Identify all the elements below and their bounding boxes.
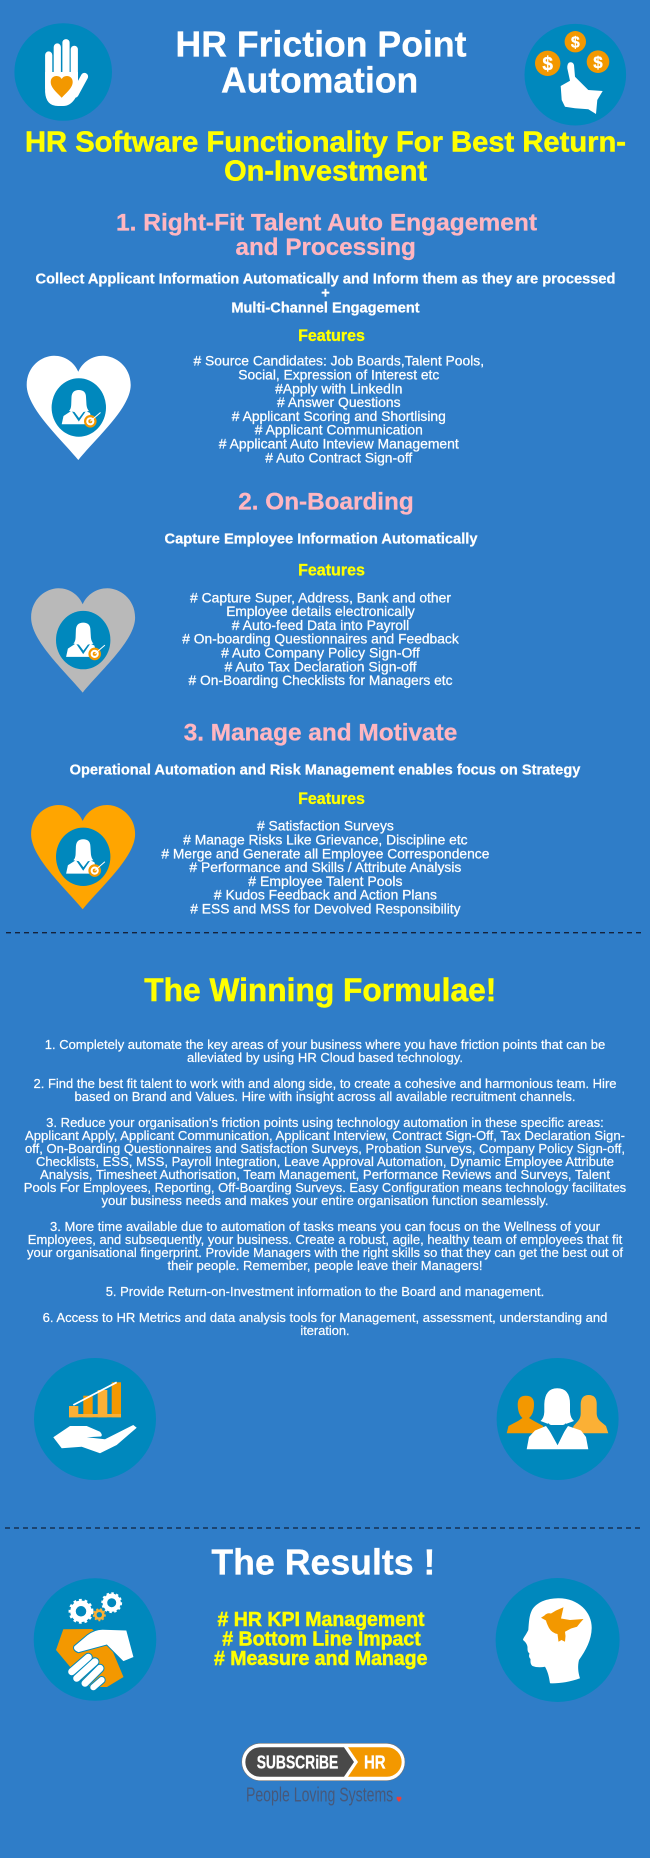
- winning formulae numbered text: off, On-Boarding Questionnaires and Satisfaction Surveys, Probation Surveys, Company Policy Sign-off,: [25, 1141, 625, 1156]
- icon: thumbs up with dollar coins: [524, 24, 626, 126]
- section 3 feature list: # Manage Risks Like Grievance, Discipline etc: [183, 832, 468, 848]
- logo: subscribe hr: SUBSCRiBE: [257, 1751, 338, 1772]
- section 2 feature list: # Auto Tax Declaration Sign-off: [224, 659, 417, 674]
- section 1 feature list: # Auto Contract Sign-off: [265, 450, 412, 465]
- winning formulae numbered text: Pools For Employees, Reporting, Off-Boarding Surveys. Easy Configuration means technology facilitates: [24, 1180, 627, 1195]
- results list: # Bottom Line Impact: [222, 1629, 421, 1651]
- section 2 description: Capture Employee Information Automatically: [164, 531, 478, 547]
- winning formulae numbered text: Employees, and subsequently, your business. Create a robust, agile, healthy team of employees that fit: [28, 1232, 623, 1247]
- title: HR Friction Point: [176, 24, 467, 65]
- title: [176, 24, 467, 100]
- title: Automation: [221, 59, 418, 100]
- icon: hand holding bar chart: [34, 1358, 156, 1480]
- icon: raised hand with heart: [14, 23, 112, 121]
- section 3 feature list: # Performance and Skills / Attribute Analysis: [189, 860, 461, 875]
- winning formulae numbered text: alleviated by using HR Cloud based technology.: [187, 1050, 463, 1065]
- section 2 feature list: Employee details electronically: [226, 604, 415, 619]
- icon: orange heart with person and target: [31, 805, 135, 909]
- section 2 features heading: Features: [298, 562, 365, 580]
- winning formulae numbered text: 6. Access to HR Metrics and data analysis tools for Management, assessment, understanding and: [43, 1310, 607, 1325]
- section 3 description: Operational Automation and Risk Management enables focus on Strategy: [70, 762, 580, 778]
- section 1 feature list: # Source Candidates: Job Boards,Talent Pools,: [193, 354, 484, 369]
- section 3 feature list: [161, 819, 490, 916]
- section 2 feature list: # Capture Super, Address, Bank and other: [190, 590, 451, 605]
- icon: thumbs up with dollar coins: $: [542, 54, 553, 75]
- icon: white heart with person and target: [27, 356, 131, 460]
- logo: subscribe hr: [242, 1743, 405, 1781]
- section 1 description: Multi-Channel Engagement: [231, 301, 420, 317]
- icon: thumbs up with dollar coins: $: [593, 53, 603, 72]
- heading: the results: The Results !: [211, 1541, 435, 1582]
- winning formulae numbered text: Applicant Apply, Applicant Communication, Applicant Interview, Contract Sign-Off, Tax Declaration Sign-: [25, 1128, 625, 1143]
- winning formulae numbered text: iteration.: [300, 1323, 350, 1338]
- winning formulae numbered text: 5. Provide Return-on-Investment information to the Board and management.: [106, 1284, 544, 1299]
- winning formulae numbered text: based on Brand and Values. Hire with insight across all available recruitment channels.: [74, 1089, 576, 1104]
- winning formulae numbered text: your business needs and makes your entire organisation function seamlessly.: [102, 1193, 548, 1208]
- section 3 features heading: Features: [298, 790, 365, 808]
- winning formulae numbered text: 2. Find the best fit talent to work with and along side, to create a cohesive and harmonious team. Hire: [34, 1076, 616, 1091]
- icon: head with bird: [496, 1578, 620, 1702]
- subtitle: [25, 127, 626, 187]
- icon: handshake with gears: [34, 1578, 156, 1701]
- section 2 heading: 2. On-Boarding: [238, 488, 414, 515]
- section 3 heading: 3. Manage and Motivate: [184, 720, 457, 747]
- section 1 features heading: Features: [298, 327, 365, 345]
- winning formulae numbered text: [24, 1037, 627, 1338]
- section 1 feature list: # Applicant Scoring and Shortlising: [232, 409, 446, 424]
- section 2 feature list: # Auto-feed Data into Payroll: [232, 618, 409, 633]
- section 1 feature list: # Applicant Communication: [255, 423, 423, 438]
- subtitle: HR Software Functionality For Best Return-: [25, 127, 626, 159]
- section 1 heading: 1. Right-Fit Talent Auto Engagement: [116, 210, 537, 237]
- section 3 feature list: # Employee Talent Pools: [248, 874, 403, 889]
- winning formulae numbered text: Analysis, Timesheet Authorisation, Team Management, Performance Reviews and Surveys, Talent: [40, 1167, 610, 1182]
- winning formulae numbered text: 3. More time available due to automation of tasks means you can focus on the Wellness of your: [50, 1219, 601, 1234]
- heading: the winning formulae: The Winning Formulae!: [144, 972, 496, 1008]
- section 1 feature list: #Apply with LinkedIn: [275, 381, 402, 396]
- section 3 feature list: # ESS and MSS for Devolved Responsibility: [190, 902, 461, 916]
- section 3 feature list: # Kudos Feedback and Action Plans: [214, 888, 437, 903]
- section 2 feature list: # On-Boarding Checklists for Managers etc: [188, 673, 453, 688]
- winning formulae numbered text: their people. Remember, people leave their Managers!: [168, 1258, 482, 1273]
- section 2 feature list: [182, 590, 459, 688]
- section 1 feature list: # Answer Questions: [277, 395, 401, 410]
- logo tagline: People Loving Systems: [246, 1785, 393, 1807]
- results list: # HR KPI Management: [218, 1609, 425, 1631]
- section 1 feature list: Social, Expression of Interest etc: [238, 368, 439, 382]
- section 1 feature list: # Applicant Auto Inteview Management: [219, 436, 459, 452]
- section 2 feature list: # On-boarding Questionnaires and Feedback: [182, 632, 459, 647]
- section 1 heading: [116, 210, 537, 261]
- section 1 description: [36, 272, 616, 317]
- section 1 feature list: [193, 354, 484, 465]
- results list: [214, 1609, 427, 1670]
- subtitle: On-Investment: [224, 155, 427, 187]
- section 3 feature list: # Satisfaction Surveys: [257, 819, 394, 834]
- logo: subscribe hr: HR: [364, 1751, 386, 1772]
- winning formulae numbered text: 1. Completely automate the key areas of your business where you have friction points that can be: [45, 1037, 605, 1052]
- winning formulae numbered text: Checklists, ESS, MSS, Payroll Integration, Leave Approval Automation, Dynamic Employee Attribute: [36, 1154, 614, 1169]
- winning formulae numbered text: 3. Reduce your organisation's friction points using technology automation in these specific areas:: [46, 1115, 604, 1130]
- section 1 heading: and Processing: [236, 234, 416, 261]
- icon: thumbs up with dollar coins: $: [571, 34, 580, 52]
- section 1 description: Collect Applicant Information Automatically and Inform them as they are processed: [36, 272, 616, 288]
- section 2 feature list: # Auto Company Policy Sign-Off: [221, 646, 420, 660]
- icon: grey heart with person and target: [31, 588, 135, 693]
- section 3 feature list: # Merge and Generate all Employee Correspondence: [161, 846, 490, 861]
- icon: team of three people: [497, 1358, 619, 1480]
- section 1 description: +: [321, 285, 330, 301]
- winning formulae numbered text: your organisational fingerprint. Provide Managers with the right skills so that they can get the best out of: [27, 1245, 623, 1260]
- results list: # Measure and Manage: [214, 1648, 427, 1670]
